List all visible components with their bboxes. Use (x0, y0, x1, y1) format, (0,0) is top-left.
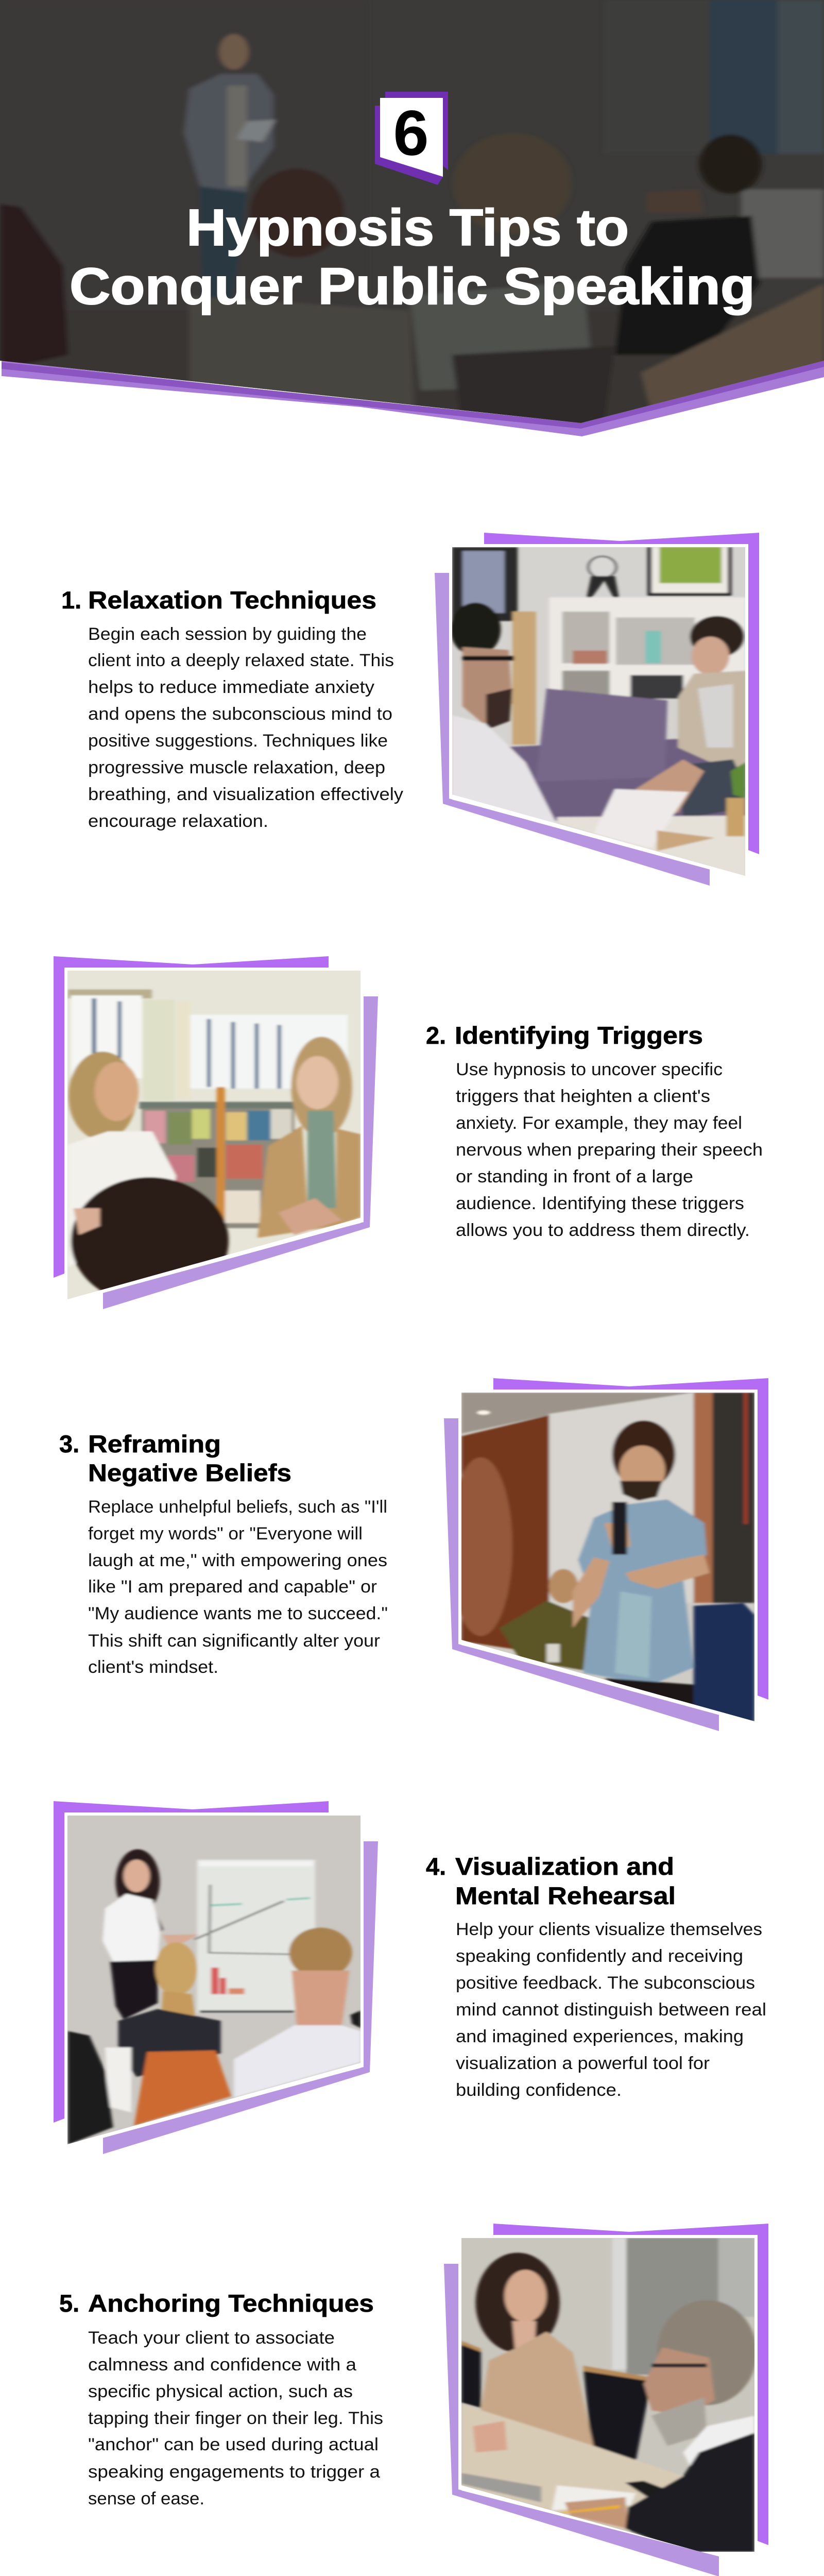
text: tip 2 body (456, 1060, 763, 1240)
text: tip 3 body: Replace unhelpful beliefs, such as "I'll (88, 1497, 387, 1517)
image frame: tip 2 (54, 956, 378, 1309)
text: tip 4 body: and imagined experiences, making (456, 2027, 744, 2046)
text: tip 1 body: encourage relaxation. (88, 811, 268, 831)
text: tip 4 body: mind cannot distinguish between real (456, 2000, 766, 2020)
text: tip 5 body: tapping their finger on their leg. This (88, 2409, 383, 2428)
heading: tip 3: Negative Beliefs (88, 1459, 291, 1486)
number badge: 6 (393, 98, 428, 169)
heading: tip 3 (59, 1430, 291, 1486)
text: tip 1 body: positive suggestions. Techniques like (88, 731, 388, 751)
text: tip 3 body (88, 1497, 388, 1677)
header banner (0, 0, 824, 464)
photo: therapist with client on sofa (447, 544, 751, 878)
text: tip 3 body: This shift can significantly alter your (88, 1631, 380, 1651)
text: tip 2 body: nervous when preparing their speech (456, 1140, 763, 1160)
text: tip 5 body: specific physical action, such as (88, 2382, 353, 2401)
text: tip 4 body: Help your clients visualize themselves (456, 1920, 762, 1939)
title (70, 199, 755, 315)
text: tip 2 body: Use hypnosis to uncover specific (456, 1060, 723, 1079)
text: tip 2 body: audience. Identifying these triggers (456, 1194, 744, 1213)
heading: tip 4: Visualization and (455, 1853, 674, 1880)
text: tip 1 body: breathing, and visualization effectively (88, 785, 403, 804)
heading: tip 2: 2. (426, 1022, 446, 1049)
text: tip 2 body: anxiety. For example, they may feel (456, 1113, 742, 1133)
text: tip 5 body: sense of ease. (88, 2489, 204, 2509)
text: tip 3 body: like "I am prepared and capable" or (88, 1577, 377, 1597)
photo: presenter at whiteboard (63, 1814, 368, 2148)
text: tip 2 body: allows you to address them directly. (456, 1221, 750, 1240)
text: tip 3 body: "My audience wants me to succeed." (88, 1604, 388, 1623)
text: tip 4 body: visualization a powerful tool for (456, 2054, 710, 2073)
panel: tip 1 relaxation techniques (61, 533, 759, 886)
photo: women talking in library (63, 969, 368, 1304)
text: tip 1 body: Begin each session by guiding the (88, 624, 367, 644)
heading: tip 5: Anchoring Techniques (88, 2290, 374, 2317)
header photo: speaker and audience (0, 0, 824, 464)
heading: tip 4: Mental Rehearsal (455, 1882, 676, 1909)
text: tip 3 body: forget my words" or "Everyone will (88, 1524, 363, 1544)
text: tip 5 body: Teach your client to associate (88, 2328, 335, 2348)
title: Conquer Public Speaking (70, 258, 755, 315)
image frame: tip 4 (54, 1801, 378, 2154)
image frame: tip 3 (444, 1378, 768, 1731)
panel: tip 5 anchoring techniques (59, 2224, 768, 2576)
heading: tip 1: 1. (61, 586, 81, 614)
heading: tip 2: Identifying Triggers (455, 1022, 703, 1049)
photo: smiling man with microphone (449, 1392, 757, 1725)
text: tip 5 body: "anchor" can be used during actual (88, 2435, 379, 2454)
heading: tip 3: 3. (59, 1430, 79, 1458)
text: tip 4 body: positive feedback. The subconscious (456, 1973, 755, 1993)
panel: tip 4 visualization and mental rehearsal (54, 1801, 766, 2154)
text: tip 5 body (88, 2328, 383, 2509)
text: tip 1 body (88, 624, 403, 831)
text: tip 1 body: helps to reduce immediate anxiety (88, 677, 374, 697)
text: tip 5 body: calmness and confidence with a (88, 2355, 356, 2375)
heading: tip 4: 4. (426, 1853, 446, 1880)
panel: tip 2 identifying triggers (54, 956, 763, 1309)
number badge (375, 92, 448, 185)
text: tip 1 body: and opens the subconscious mind to (88, 704, 392, 724)
text: tip 5 body: speaking engagements to trigger a (88, 2462, 380, 2482)
text: tip 3 body: client's mindset. (88, 1657, 218, 1677)
panel: tip 3 reframing negative beliefs (59, 1378, 768, 1731)
text: tip 4 body: speaking confidently and receiving (456, 1946, 743, 1966)
text: tip 2 body: or standing in front of a large (456, 1167, 693, 1187)
text: tip 1 body: client into a deeply relaxed state. This (88, 651, 394, 670)
text: tip 4 body: building confidence. (456, 2080, 622, 2100)
text: tip 3 body: laugh at me," with empowering ones (88, 1551, 387, 1570)
image frame: tip 5 (444, 2224, 768, 2576)
header purple ribbon (2, 361, 824, 436)
heading: tip 3: Reframing (88, 1430, 221, 1458)
text: tip 1 body: progressive muscle relaxation, deep (88, 758, 385, 777)
title: Hypnosis Tips to (186, 199, 629, 257)
image frame: tip 1 (435, 533, 759, 886)
heading: tip 5: 5. (59, 2290, 79, 2317)
heading: tip 1: Relaxation Techniques (88, 586, 376, 614)
photo: woman and bearded man at table (457, 2237, 757, 2555)
text: tip 2 body: triggers that heighten a client's (456, 1087, 710, 1106)
heading: tip 4 (426, 1853, 676, 1909)
text: tip 4 body (456, 1920, 766, 2100)
